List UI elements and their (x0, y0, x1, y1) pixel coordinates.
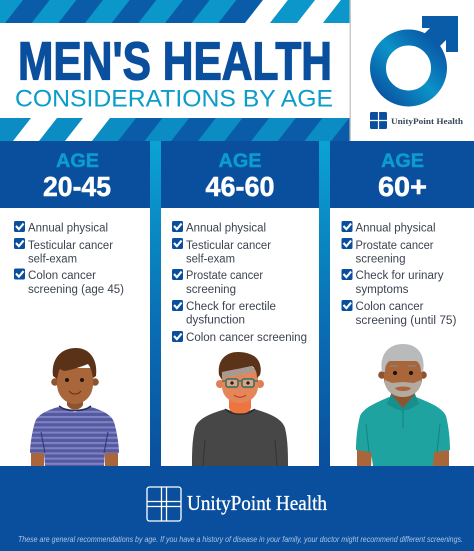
footer wordmark: UnityPoint Health (187, 491, 327, 515)
checklist: screening (356, 254, 406, 266)
subtitle: CONSIDERATIONS BY AGE (15, 86, 333, 112)
title panel (0, 23, 351, 118)
person: middle-aged man with glasses (192, 352, 288, 466)
heading: range: 60+ (378, 171, 427, 202)
checklist: dysfunction (186, 314, 245, 326)
heading: age: AGE (381, 150, 424, 172)
checklist (342, 221, 457, 327)
heading: age: AGE (218, 150, 262, 172)
panel: age 60+ (342, 150, 457, 466)
panel: footer (0, 466, 474, 551)
checklist: Annual physical (28, 222, 108, 234)
logo wordmark: UnityPoint Health (391, 116, 463, 126)
checklist: Prostate cancer (356, 240, 434, 252)
checklist: self-exam (28, 254, 77, 266)
checklist: screening (186, 284, 236, 296)
checklist: Testicular cancer (28, 240, 113, 252)
panel: logo (350, 0, 474, 141)
checklist: self-exam (186, 254, 235, 266)
checklist: Colon cancer (28, 270, 96, 282)
checklist: screening (until 75) (356, 315, 457, 327)
checklist: Check for erectile (186, 301, 276, 313)
heading: range: 20-45 (43, 171, 111, 202)
checklist: Annual physical (186, 222, 266, 234)
checklist (14, 221, 124, 296)
checklist: Colon cancer (356, 301, 424, 313)
checklist: Colon cancer screening (186, 332, 307, 344)
panel: age 20-45 (14, 150, 124, 466)
panel: column backgrounds (0, 141, 474, 466)
logo mark (370, 112, 387, 129)
checklist: Prostate cancer (186, 270, 263, 282)
top stripes (0, 0, 351, 23)
bottom stripes (0, 118, 351, 141)
heading: age: AGE (56, 150, 99, 172)
checklist: Annual physical (356, 222, 436, 234)
checklist: Check for urinary (356, 270, 444, 282)
panel: age 46-60 (172, 150, 307, 466)
checklist: screening (age 45) (28, 284, 124, 296)
person: young man (30, 348, 119, 466)
checklist (172, 221, 307, 344)
checklist: symptoms (356, 284, 409, 296)
heading: range: 46-60 (206, 171, 274, 202)
person: older man with beard (356, 344, 450, 466)
icon: male symbol (378, 16, 458, 98)
checklist: Testicular cancer (186, 240, 271, 252)
icon: footer logo mark (147, 487, 181, 521)
title: MEN'S HEALTH (18, 32, 332, 92)
